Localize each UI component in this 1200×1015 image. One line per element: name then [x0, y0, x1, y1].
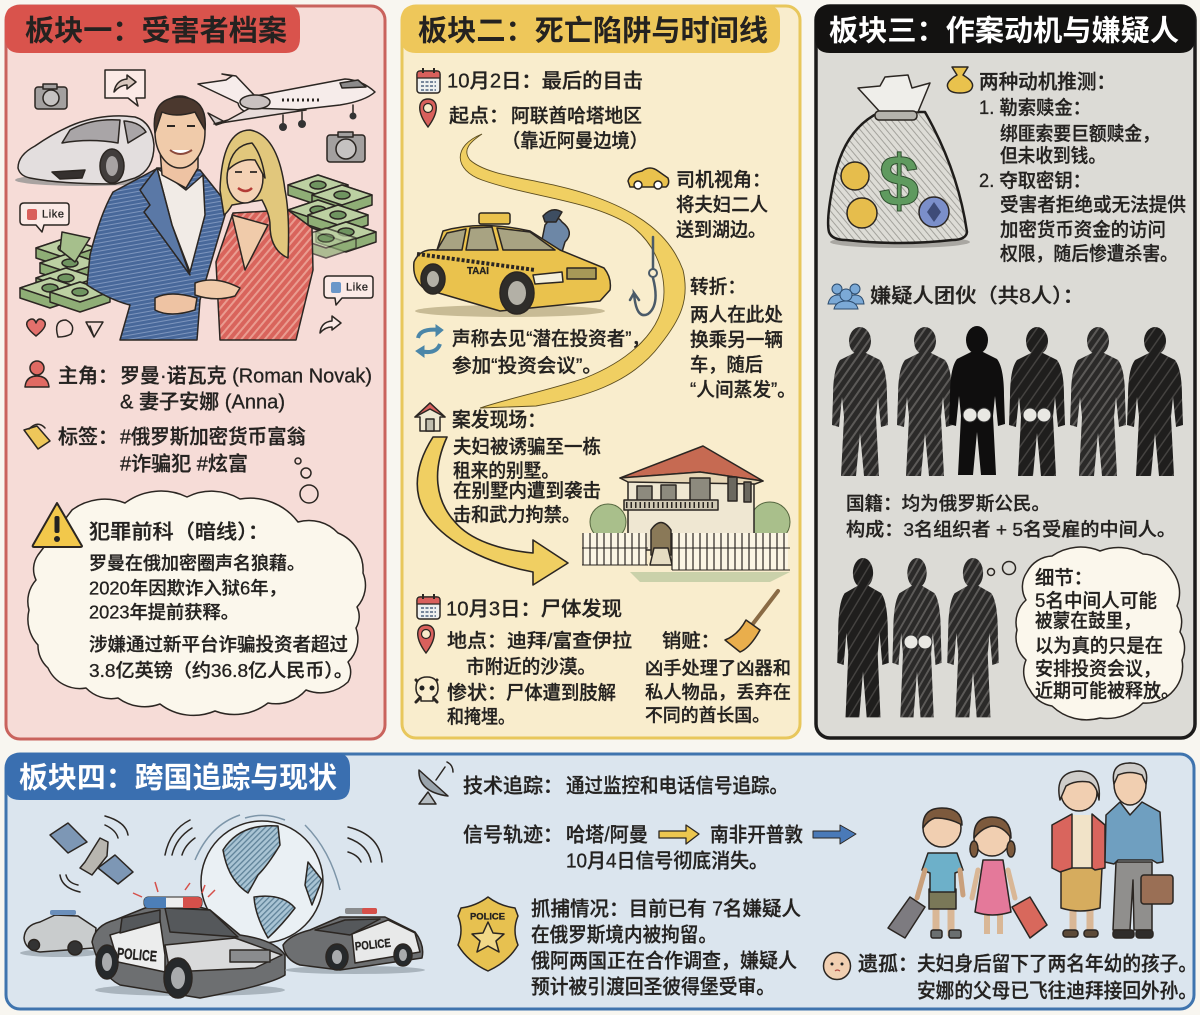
text: nationality and composition: 构成：3名组织者 + 5名受雇的中间人。: [846, 519, 1176, 540]
grandfather with briefcase: [1105, 763, 1173, 938]
heading: panel three: 板块三：作案动机与嫌疑人: [829, 14, 1179, 48]
text: tags: 标签：: [58, 426, 118, 448]
text: disposal: 不同的酋长国。: [645, 706, 770, 726]
icon: house: [415, 403, 445, 431]
text: claimed investors: [452, 328, 650, 377]
illustration: couple: [87, 96, 313, 340]
text: location: [447, 630, 632, 678]
route ribbon upper: [460, 134, 685, 408]
illustration: taxi: [414, 210, 610, 317]
text: driver view: [676, 169, 771, 241]
icon: like bubble right: Like: [346, 282, 368, 294]
text: two motives: [979, 70, 1186, 265]
text: october 3 heading: 10月3日：尸体发现: [446, 598, 622, 620]
callout: criminal record: 3.8亿英镑（约36.8亿人民币）。: [89, 660, 353, 681]
text: two motives: 权限，随后惨遭杀害。: [1000, 243, 1178, 265]
text: tags: [58, 426, 306, 476]
text: turning point: “人间蒸发”。: [690, 379, 796, 401]
text: protagonist: 罗曼·诺瓦克 (Roman Novak): [120, 364, 372, 388]
callout: criminal record: 涉嫌通过新平台诈骗投资者超过: [89, 634, 348, 655]
handcuffs upper: [963, 408, 1051, 422]
text: location: 地点：: [447, 630, 507, 652]
text: location: 市附近的沙漠。: [466, 656, 596, 678]
text: nationality and composition: 国籍：均为俄罗斯公民。: [846, 493, 1050, 514]
text: two motives: 绑匪索要巨额赎金，: [1000, 123, 1160, 145]
panel: motive and suspects: [815, 5, 1195, 738]
text: two motives: 加密货币资金的访问: [1000, 219, 1166, 241]
text: turning point: 车，随后: [690, 354, 763, 376]
text: arrests: 俄阿两国正在合作调查，嫌疑人: [531, 950, 797, 972]
heading: panel one: [5, 5, 300, 53]
text: turning point: 两人在此处: [690, 304, 783, 326]
text: crime scene: 在别墅内遭到袭击: [453, 480, 601, 502]
text: condition of bodies: 尸体遭到肢解: [506, 682, 616, 704]
text: two motives: 2. 夺取密钥：: [979, 170, 1091, 192]
icon: calendar october 3: [417, 594, 440, 619]
text: turning point: [690, 276, 796, 401]
heading: panel four: [5, 753, 350, 800]
icon: like bubble left: [20, 203, 69, 232]
text: disposal: [645, 630, 791, 726]
text: protagonist: & 妻子安娜 (Anna): [120, 390, 285, 414]
illustration: money bag: $: [879, 142, 919, 222]
text: arrests: 预计被引渡回圣彼得堡受审。: [531, 976, 775, 998]
text: claimed investors: 参加“投资会议”。: [452, 355, 602, 377]
icon: tag: [24, 424, 50, 449]
text: disposal: 销赃：: [662, 630, 720, 652]
text: claimed investors: 声称去见“潜在投资者”，: [452, 328, 650, 350]
text: tags: #俄罗斯加密货币富翁: [120, 426, 306, 448]
icon: small money bag: [947, 67, 973, 93]
text: start point: 起点：: [449, 105, 509, 127]
text: signal track: [463, 824, 803, 872]
boy with suitcase: [888, 808, 963, 938]
icon: police badge: POLICE: [470, 912, 505, 922]
text: orphans: 遗孤：: [858, 952, 918, 976]
text: driver view: 司机视角：: [676, 169, 771, 191]
callout: criminal record: 2020年因欺诈入狱6年，: [89, 578, 287, 598]
panel: death trap timeline: [401, 5, 800, 738]
text: signal track: 信号轨迹：: [463, 824, 563, 846]
text: crime scene: 击和武力拘禁。: [453, 504, 580, 526]
girl with suitcase: [970, 817, 1047, 938]
illustration: taxi: TAAI: [467, 266, 489, 277]
text: protagonist: [58, 364, 372, 414]
text: turning point: 转折：: [690, 276, 746, 298]
text: disposal: 私人物品，丢弃在: [645, 682, 791, 702]
text: signal track: 10月4日信号彻底消失。: [566, 850, 768, 872]
heading: panel two: 板块二：死亡陷阱与时间线: [418, 14, 768, 48]
text: two motives: 1. 勒索赎金：: [979, 97, 1091, 119]
callout: details: 安排投资会议，: [1035, 658, 1161, 680]
icon: share bubble: [105, 70, 145, 106]
text: protagonist: 主角：: [58, 364, 118, 388]
illustration: police car right: [283, 908, 425, 974]
text: condition of bodies: [447, 682, 616, 728]
text: two motives: 两种动机推测：: [979, 70, 1116, 94]
icon: police badge: [458, 897, 518, 971]
text: arrests: [531, 898, 801, 998]
text: tech tracking: 技术追踪：: [463, 774, 563, 798]
text: signal track: 南非开普敦: [710, 824, 803, 846]
illustration: police car main: [92, 882, 285, 998]
icon: group of people: [828, 284, 864, 309]
text: crime scene: 租来的别墅。: [453, 460, 559, 482]
route ribbon lower with arrow: [417, 437, 568, 585]
icon: camera right: [327, 132, 365, 162]
icon: money stacks right: [288, 175, 376, 258]
illustration: money bag: [828, 75, 970, 248]
text: disposal: 凶手处理了凶器和: [645, 658, 791, 678]
heading: panel two: [401, 5, 780, 53]
callout: criminal record: [28, 458, 365, 715]
illustration: villa: [582, 446, 790, 582]
illustration: luxury sports car: [15, 116, 155, 186]
icon: location pin: [418, 625, 434, 653]
text: location: 迪拜/富查伊拉: [507, 630, 632, 652]
text: two motives: 但未收到钱。: [1000, 145, 1106, 167]
heading: panel one: 板块一：受害者档案: [25, 14, 287, 48]
arrow: yellow: [659, 825, 699, 844]
callout: criminal record: 罗曼在俄加密圈声名狼藉。: [89, 554, 305, 574]
text: october 2 heading: 10月2日：最后的目击: [447, 70, 643, 92]
icon: broom: [725, 591, 778, 652]
text: turning point: 换乘另一辆: [690, 329, 783, 351]
illustration: police car right: POLICE: [354, 936, 391, 953]
callout: criminal record: 犯罪前科（暗线）：: [89, 520, 269, 544]
figures: suspects lower row: [837, 558, 999, 717]
text: condition of bodies: 惨状：: [447, 682, 507, 704]
icon: calendar october 2: [417, 68, 440, 93]
text: tech tracking: 通过监控和电话信号追踪。: [566, 774, 788, 798]
text: start point: [449, 105, 648, 152]
text: suspects heading: 嫌疑人团伙（共8人）：: [870, 284, 1084, 308]
callout: details: 近期可能被释放。: [1035, 680, 1179, 702]
icons: social reactions: [27, 316, 341, 337]
handcuffs lower: [904, 635, 932, 649]
heading: panel four: 板块四：跨国追踪与现状: [19, 762, 337, 794]
text: condition of bodies: 和掩埋。: [447, 706, 515, 728]
icon: start pin: [420, 99, 436, 127]
icon: skull: [416, 677, 438, 702]
text: tech tracking: [463, 774, 788, 798]
callout: criminal record: 2023年提前获释。: [89, 602, 239, 622]
panel: tracking and current status: [5, 753, 1197, 1009]
arrow: blue: [813, 825, 856, 844]
icon: person: [25, 361, 49, 387]
text: crime scene: 案发现场：: [452, 408, 546, 432]
panel: victim profile: [5, 5, 385, 739]
icon: like bubble left: Like: [42, 208, 64, 220]
callout: details: 以为真的只是在: [1035, 635, 1163, 657]
illustration: police car left: [20, 910, 100, 957]
icon: like bubble right: [324, 276, 373, 305]
text: start point: （靠近阿曼边境）: [502, 130, 648, 152]
icon: baby face: [824, 952, 850, 980]
man: [87, 96, 228, 340]
woman: [195, 130, 313, 340]
text: crime scene: [452, 408, 601, 526]
callout: details: 5名中间人可能: [1035, 590, 1157, 612]
illustration: private jet: [198, 74, 375, 131]
text: tags: #诈骗犯 #炫富: [120, 452, 248, 476]
text: driver view: 将夫妇二人: [676, 194, 768, 216]
illustration: globe and signals: [165, 815, 382, 943]
illustration: police car main: POLICE: [116, 945, 158, 965]
text: signal track: 哈塔/阿曼: [566, 824, 648, 846]
text: arrests: 抓捕情况：目前已有 7名嫌疑人: [531, 898, 801, 920]
callout: details: 细节：: [1035, 567, 1093, 589]
icon: money stacks left: [20, 232, 110, 312]
callout: details: [988, 547, 1185, 720]
grandmother: [1052, 771, 1105, 937]
icon: small taxi: [628, 168, 669, 189]
illustration: children and grandparents: [888, 763, 1173, 938]
callout: details: 被蒙在鼓里，: [1035, 610, 1141, 632]
text: driver view: 送到湖边。: [676, 219, 766, 241]
icon: fish hook: [630, 237, 657, 315]
text: start point: 阿联酋哈塔地区: [511, 105, 642, 127]
heading: panel three: [815, 5, 1195, 53]
text: nationality and composition: [846, 493, 1176, 540]
illustration: satellite: [50, 816, 133, 892]
icon: satellite dish: [419, 762, 453, 804]
text: crime scene: 夫妇被诱骗至一栋: [453, 436, 601, 458]
text: two motives: 受害者拒绝或无法提供: [1000, 194, 1186, 216]
icon: camera left: [35, 84, 67, 109]
icon: cycle arrows: [416, 325, 443, 357]
figures: suspects upper row: [832, 326, 1183, 476]
text: orphans: [858, 952, 1197, 1002]
icon: warning triangle: [33, 503, 82, 547]
text: arrests: 在俄罗斯境内被拘留。: [531, 924, 717, 946]
